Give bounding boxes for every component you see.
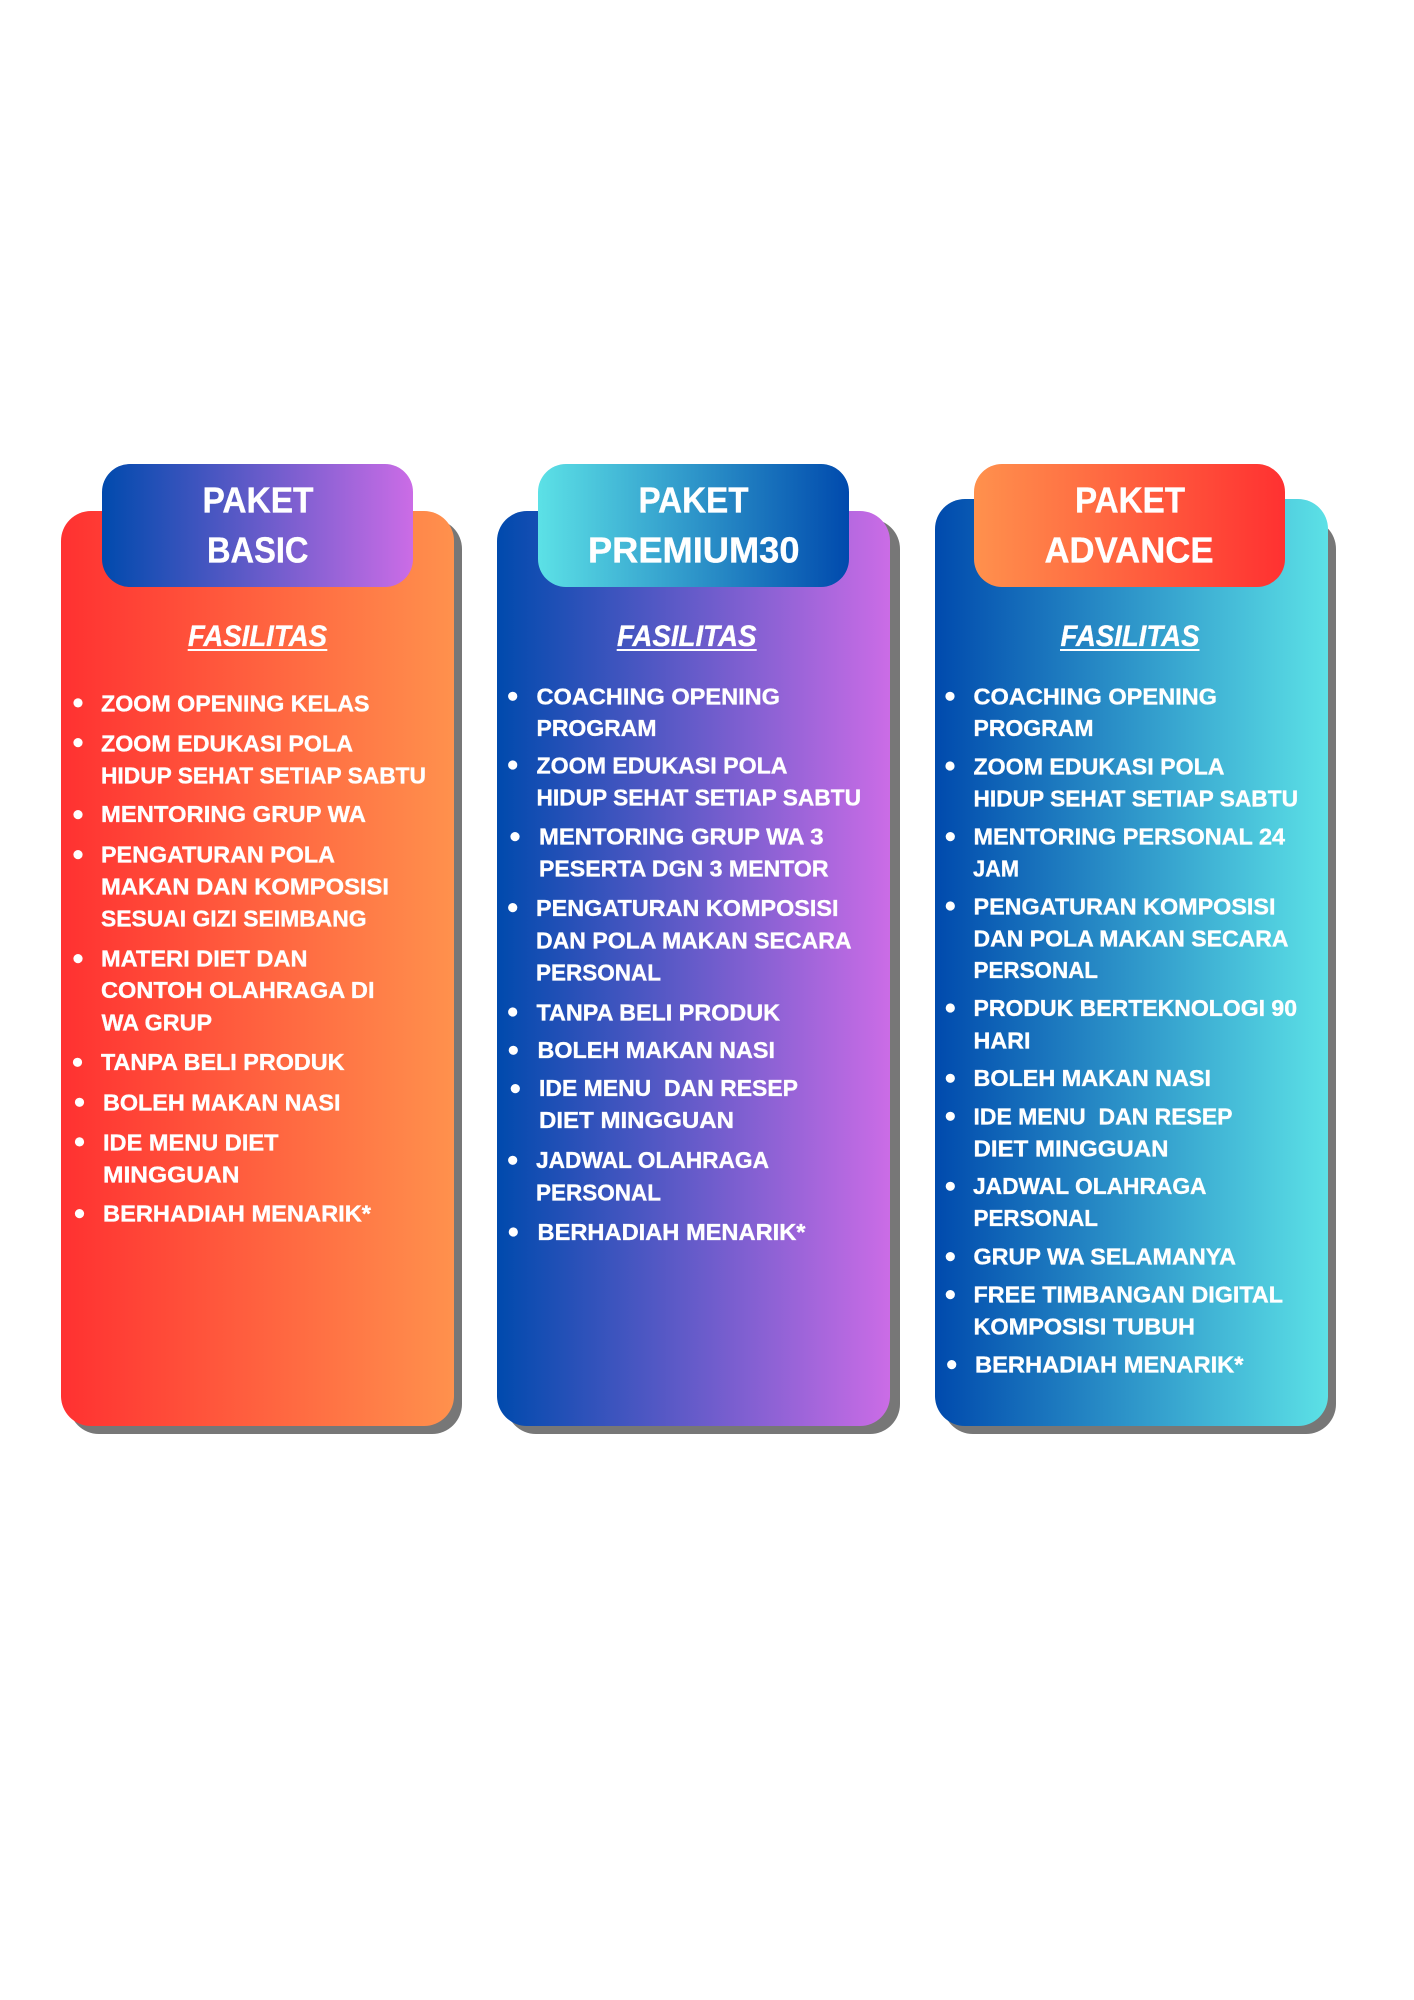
item: materi diet bbox=[73, 945, 375, 1035]
item: ide menu diet: IDE MENU DIET bbox=[103, 1129, 278, 1155]
item: mentoring grup wa 3 peserta: MENTORING GRUP WA 3 bbox=[539, 823, 824, 849]
item: tanpa beli produk: TANPA BELI PRODUK bbox=[536, 999, 780, 1025]
item: zoom edukasi pola bbox=[73, 730, 426, 788]
heading: paket premium30: PAKET bbox=[638, 480, 749, 521]
item: produk berteknologi 90 hari: PRODUK BERTEKNOLOGI 90 bbox=[974, 995, 1297, 1021]
item: pengaturan komposisi: PERSONAL bbox=[974, 957, 1098, 983]
item: mentoring personal 24 jam bbox=[946, 823, 1285, 882]
item: materi diet: MATERI DIET DAN bbox=[101, 945, 308, 971]
item: mentoring personal 24 jam: JAM bbox=[973, 856, 1019, 882]
panel: paket basic bbox=[61, 464, 462, 1434]
item: zoom edukasi pola: HIDUP SEHAT SETIAP SABTU bbox=[974, 785, 1298, 811]
item: free timbangan digital: FREE TIMBANGAN DIGITAL bbox=[974, 1281, 1283, 1307]
item: coaching opening program: PROGRAM bbox=[536, 715, 656, 741]
card background bbox=[497, 511, 890, 1426]
heading: paket advance bbox=[974, 464, 1285, 587]
item: mentoring personal 24 jam: MENTORING PERSONAL 24 bbox=[974, 823, 1285, 849]
item: mentoring grup wa 3 peserta bbox=[510, 823, 829, 881]
item: jadwal olahraga personal: PERSONAL bbox=[536, 1179, 661, 1205]
item: coaching opening program: COACHING OPENING bbox=[536, 683, 780, 709]
item: pengaturan komposisi: DAN POLA MAKAN SECARA bbox=[536, 927, 852, 953]
item: free timbangan digital: KOMPOSISI TUBUH bbox=[974, 1313, 1195, 1339]
item: coaching opening program: PROGRAM bbox=[974, 715, 1094, 741]
item: pengaturan pola makan: MAKAN DAN KOMPOSISI bbox=[101, 874, 389, 900]
card shadow bbox=[69, 519, 462, 1434]
item: produk berteknologi 90 hari bbox=[946, 995, 1297, 1053]
item: boleh makan nasi: BOLEH MAKAN NASI bbox=[974, 1065, 1211, 1091]
item: zoom edukasi pola: ZOOM EDUKASI POLA bbox=[101, 730, 353, 756]
item: boleh makan nasi: BOLEH MAKAN NASI bbox=[538, 1037, 775, 1063]
item: ide menu dan resep bbox=[511, 1075, 798, 1133]
item: berhadiah menarik: BERHADIAH MENARIK* bbox=[103, 1200, 371, 1226]
item: zoom edukasi pola: ZOOM EDUKASI POLA bbox=[974, 753, 1224, 779]
item: grup wa selamanya: GRUP WA SELAMANYA bbox=[974, 1244, 1236, 1270]
item: ide menu dan resep bbox=[946, 1103, 1232, 1161]
item: ide menu diet: MINGGUAN bbox=[103, 1161, 240, 1187]
list: basic features bbox=[73, 690, 426, 1226]
heading: paket advance: ADVANCE bbox=[1044, 530, 1214, 571]
item: berhadiah menarik: BERHADIAH MENARIK* bbox=[975, 1352, 1244, 1378]
subheading: fasilitas: FASILITAS bbox=[617, 620, 756, 653]
item: ide menu dan resep: DIET MINGGUAN bbox=[539, 1107, 734, 1133]
item: pengaturan komposisi: DAN POLA MAKAN SECARA bbox=[974, 925, 1288, 951]
item: ide menu dan resep: DIET MINGGUAN bbox=[974, 1135, 1168, 1161]
item: free timbangan digital bbox=[946, 1281, 1283, 1339]
item: jadwal olahraga personal: JADWAL OLAHRAGA bbox=[973, 1173, 1206, 1199]
item: berhadiah menarik: BERHADIAH MENARIK* bbox=[538, 1219, 806, 1245]
item: coaching opening program bbox=[508, 683, 780, 741]
subheading: fasilitas: FASILITAS bbox=[1060, 620, 1200, 653]
item: materi diet: WA GRUP bbox=[102, 1009, 212, 1035]
item: jadwal olahraga personal: PERSONAL bbox=[974, 1205, 1098, 1231]
heading: paket premium30: PREMIUM30 bbox=[588, 530, 800, 571]
item: pengaturan pola makan bbox=[73, 841, 389, 931]
item: ide menu dan resep: IDE MENU DAN RESEP bbox=[974, 1103, 1232, 1129]
heading: paket basic: PAKET bbox=[202, 480, 314, 521]
item: pengaturan komposisi: PENGATURAN KOMPOSISI bbox=[536, 895, 838, 921]
item: pengaturan komposisi bbox=[946, 893, 1288, 983]
item: mentoring grup wa 3 peserta: PESERTA DGN 3 MENTOR bbox=[539, 855, 829, 881]
card shadow bbox=[506, 519, 900, 1434]
item: pengaturan komposisi bbox=[508, 895, 852, 985]
heading: paket basic bbox=[102, 464, 413, 587]
list: premium30 features bbox=[508, 683, 861, 1245]
item: produk berteknologi 90 hari: HARI bbox=[974, 1027, 1030, 1053]
item: ide menu dan resep: IDE MENU DAN RESEP bbox=[539, 1075, 798, 1101]
heading: paket basic: BASIC bbox=[207, 530, 308, 571]
item: zoom edukasi pola: ZOOM EDUKASI POLA bbox=[536, 752, 788, 778]
item: coaching opening program bbox=[945, 683, 1217, 741]
item: zoom edukasi pola bbox=[508, 752, 861, 810]
item: materi diet: CONTOH OLAHRAGA DI bbox=[101, 977, 374, 1003]
list: advance features bbox=[945, 683, 1298, 1378]
item: zoom opening kelas: ZOOM OPENING KELAS bbox=[101, 690, 370, 716]
panel: paket premium30 bbox=[497, 464, 900, 1434]
card background bbox=[935, 499, 1328, 1426]
item: zoom edukasi pola: HIDUP SEHAT SETIAP SABTU bbox=[101, 762, 426, 788]
item: tanpa beli produk: TANPA BELI PRODUK bbox=[101, 1049, 345, 1075]
item: pengaturan komposisi: PERSONAL bbox=[536, 959, 661, 985]
item: pengaturan pola makan: SESUAI GIZI SEIMBANG bbox=[101, 905, 366, 931]
panel: paket advance bbox=[935, 464, 1336, 1434]
item: jadwal olahraga personal bbox=[946, 1173, 1206, 1231]
subheading: fasilitas: FASILITAS bbox=[188, 620, 327, 653]
heading: paket advance: PAKET bbox=[1075, 480, 1185, 521]
card background bbox=[61, 511, 454, 1426]
item: jadwal olahraga personal: JADWAL OLAHRAGA bbox=[536, 1147, 769, 1173]
item: jadwal olahraga personal bbox=[508, 1147, 769, 1205]
item: mentoring grup wa: MENTORING GRUP WA bbox=[101, 801, 366, 827]
item: zoom edukasi pola bbox=[945, 753, 1298, 811]
heading: paket premium30 bbox=[538, 464, 849, 587]
item: zoom edukasi pola: HIDUP SEHAT SETIAP SABTU bbox=[536, 784, 861, 810]
card shadow bbox=[943, 519, 1336, 1434]
item: ide menu diet bbox=[75, 1129, 279, 1187]
item: coaching opening program: COACHING OPENING bbox=[974, 683, 1217, 709]
item: pengaturan komposisi: PENGATURAN KOMPOSISI bbox=[974, 893, 1276, 919]
item: pengaturan pola makan: PENGATURAN POLA bbox=[101, 841, 335, 867]
item: boleh makan nasi: BOLEH MAKAN NASI bbox=[103, 1089, 340, 1115]
